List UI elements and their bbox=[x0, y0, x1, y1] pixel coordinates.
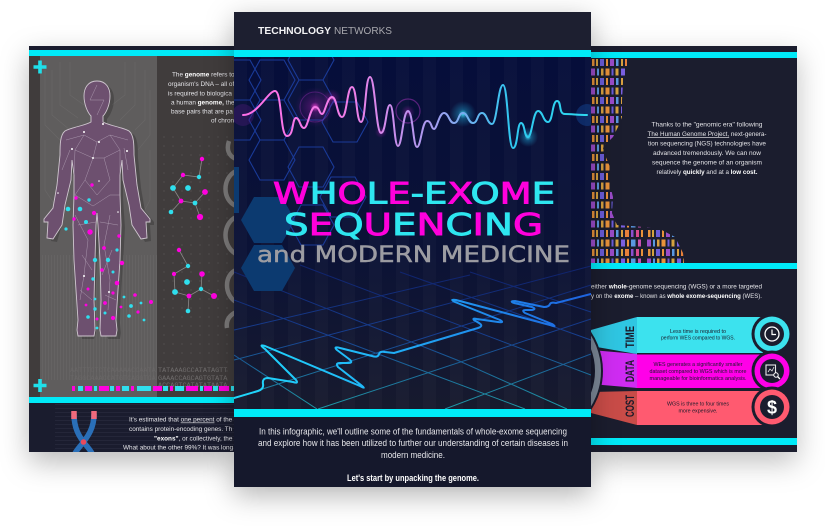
human body figure bbox=[44, 81, 154, 339]
comparison chart: time data cost bbox=[463, 301, 792, 441]
row: cost: WGS is three to four times bbox=[667, 402, 729, 408]
row: data: dataset compared to WGS which is more bbox=[650, 369, 746, 375]
header logo bbox=[258, 25, 392, 37]
dna sequence letters: TAGGCAAACCATGTCAGGTCA bbox=[70, 375, 157, 383]
row: cost: COST bbox=[623, 395, 637, 417]
dna sequence letters bbox=[70, 367, 228, 390]
text: genomic era: The Human Genome Project, next-genera- bbox=[648, 131, 766, 138]
main title: SEQUENCING bbox=[284, 208, 543, 243]
text: genomic era: relatively quickly and at a low cost. bbox=[656, 169, 758, 176]
hero artwork bbox=[234, 57, 591, 409]
text: genome intro: base pairs that are pa bbox=[171, 108, 233, 116]
row: data bbox=[623, 350, 792, 392]
text: genome intro: of chron bbox=[211, 118, 235, 124]
text: one percent: "exons", or collectively, the " bbox=[154, 436, 236, 442]
intro text: In this infographic, we'll outline some of the fundamentals of whole-exome sequencing bbox=[259, 426, 567, 436]
row: data: manageable for bioinformatics analysis. bbox=[650, 376, 747, 382]
intro text bbox=[258, 426, 568, 483]
row: cost: $ bbox=[767, 398, 777, 418]
panel: left page bbox=[29, 46, 238, 460]
text: wgs vs wes: y on the exome – known as whole exome-sequencing (WES). bbox=[591, 293, 762, 300]
text: wgs vs wes bbox=[591, 284, 762, 300]
text: genomic era: Thanks to the "genomic era" following bbox=[652, 122, 763, 128]
intro text: Let's start by unpacking the genome. bbox=[347, 473, 479, 483]
text: genome intro bbox=[168, 72, 238, 124]
text: genomic era bbox=[648, 122, 766, 176]
row: time: Less time is required to bbox=[670, 329, 726, 335]
icon: chromosome bbox=[73, 411, 94, 460]
hexagon pattern bbox=[234, 57, 368, 291]
dna sequence letters: GAAACCAGCAGTGTATA bbox=[158, 375, 228, 383]
dna sequence letters: ACCAGTCATATATAATA bbox=[158, 382, 228, 390]
row: cost bbox=[623, 386, 792, 428]
intro text: and explore how it has been utilized to further our understanding of certain diseases in bbox=[258, 438, 568, 448]
row: time bbox=[623, 314, 792, 354]
intro text: modern medicine. bbox=[381, 450, 445, 460]
row: data: DATA bbox=[623, 360, 637, 382]
dna helix arcs bbox=[226, 141, 236, 328]
molecule top bbox=[169, 157, 208, 220]
perspective grid bbox=[234, 265, 591, 409]
text: genomic era: sequence the genome of an organism bbox=[652, 160, 762, 166]
header logo: NETWORKS bbox=[334, 25, 392, 37]
row: time: perform WES compared to WGS. bbox=[661, 336, 735, 342]
main title bbox=[258, 181, 569, 262]
text: wgs vs wes: either whole-genome sequencing (WGS) or a more targeted bbox=[591, 284, 762, 290]
text: genome intro: is required to biologica bbox=[168, 90, 232, 98]
row: data: WES generates a significantly smaller bbox=[654, 362, 743, 368]
segmented sequence bar bbox=[72, 386, 234, 391]
text: genome intro: organism's DNA – all of t bbox=[168, 81, 238, 88]
main title: and MODERN MEDICINE bbox=[257, 243, 570, 268]
row: cost: more expensive. bbox=[678, 408, 718, 414]
dna sequence letters: TATAAAGCCATATAGTT bbox=[158, 367, 227, 375]
text: genome intro: a human genome, ther bbox=[171, 100, 238, 106]
glow markers bbox=[232, 87, 598, 147]
panel: center cover page bbox=[212, 12, 598, 487]
main title: W HOLE-E XOME bbox=[273, 176, 555, 210]
waveform bbox=[243, 77, 587, 148]
row: time: TIME bbox=[623, 326, 637, 348]
text: one percent: It's estimated that one percent of the bbox=[129, 416, 233, 424]
text: one percent bbox=[123, 416, 236, 452]
data dots on body bbox=[64, 183, 153, 329]
genome bars silhouette bbox=[591, 58, 684, 263]
heartbeat line bbox=[234, 294, 591, 398]
text: genomic era: advanced tremendously. We can now bbox=[653, 150, 761, 157]
panel: right page bbox=[463, 46, 797, 452]
icon: plus top bbox=[34, 60, 46, 74]
molecule bottom bbox=[172, 248, 217, 313]
header logo: TECHNOLOGY bbox=[258, 25, 331, 37]
icon: plus bottom bbox=[34, 379, 46, 392]
text: genome intro: The genome refers to bbox=[172, 72, 235, 78]
dna sequence letters: AATTTCTCTCAAAAACCAATA bbox=[70, 367, 157, 375]
text: one percent: contains protein-encoding genes. Th bbox=[129, 426, 233, 433]
text: genomic era: tion sequencing (NGS) technologies have bbox=[648, 140, 766, 148]
text: one percent: What about the other 99%? It was long bbox=[123, 444, 234, 452]
